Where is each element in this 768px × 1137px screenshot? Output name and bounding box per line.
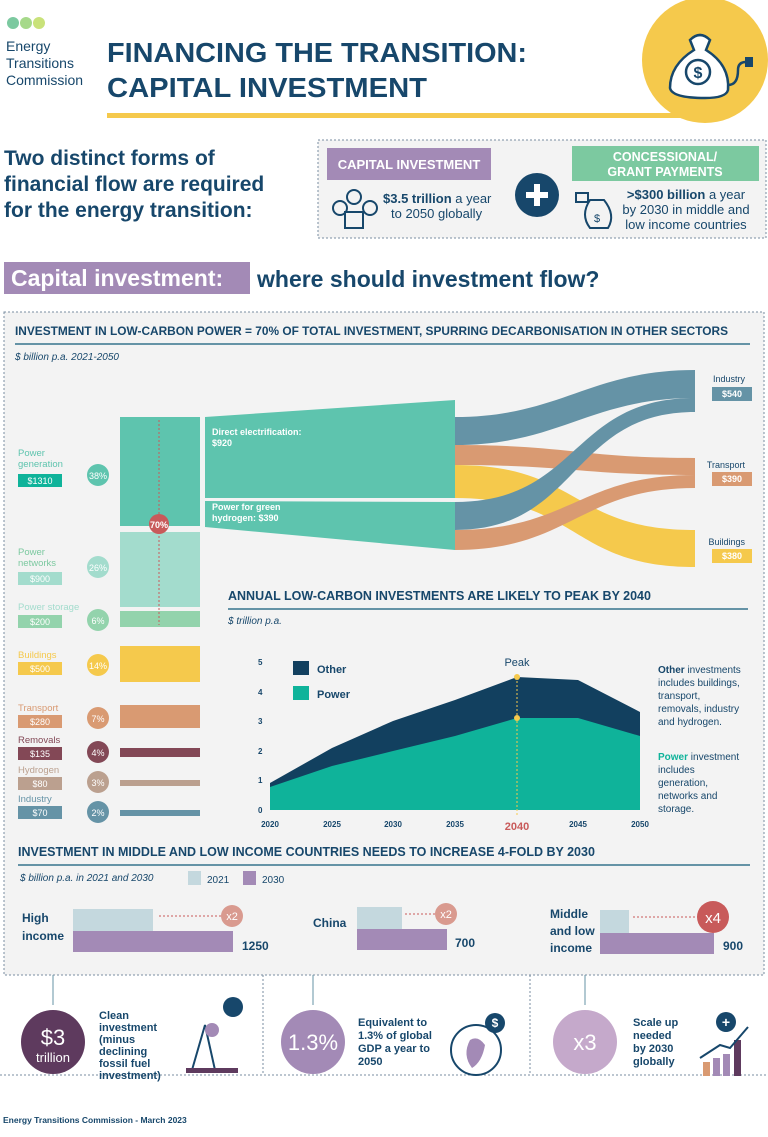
section heading <box>4 262 599 294</box>
footer: Energy Transitions Commission - March 2023 <box>3 1115 187 1125</box>
line chart: annual investments: 5 <box>258 658 263 667</box>
icon: money bag hand <box>576 193 611 228</box>
bars: high income: income <box>22 929 64 943</box>
category labels: 38% <box>89 471 107 481</box>
line chart: annual investments <box>227 589 748 833</box>
bars: middle and low income: Middle <box>550 907 588 921</box>
intro text <box>4 147 264 222</box>
stat: $3 trillion: investment <box>99 1022 157 1034</box>
category labels: 2% <box>91 808 105 818</box>
sankey source: green hydrogen: Power for green <box>212 502 281 512</box>
line chart: annual investments: ANNUAL LOW-CARBON INVESTMENTS ARE LIKELY TO PEAK BY 2040 <box>228 589 651 603</box>
category labels: 14% <box>89 661 107 671</box>
bars: china <box>313 903 475 950</box>
chart notes: generation, <box>658 778 708 789</box>
chart notes: includes buildings, <box>658 678 740 689</box>
capital investment label: CAPITAL INVESTMENT <box>338 157 480 172</box>
chart notes: networks and <box>658 791 717 802</box>
bars: china: x2 <box>440 909 452 921</box>
stat: $3 trillion: (minus <box>99 1034 135 1046</box>
title <box>107 37 707 118</box>
chart notes: Other investments <box>658 665 741 676</box>
bars: high income: 1250 <box>242 939 269 953</box>
stat: 1.3% <box>281 1010 432 1074</box>
title: CAPITAL INVESTMENT <box>107 72 427 103</box>
category labels: 3% <box>91 778 105 788</box>
capital investment label <box>327 148 491 180</box>
stat: $3 trillion <box>21 1010 161 1082</box>
category labels: $80 <box>32 779 48 789</box>
stat: x3: Scale up <box>633 1017 679 1029</box>
sankey targets <box>707 374 752 563</box>
logo <box>6 17 83 88</box>
bars: middle and low income: 900 <box>723 939 743 953</box>
heading: low-carbon power: $ billion p.a. 2021-2050 <box>14 352 119 363</box>
concessional text: low income countries <box>625 217 747 232</box>
category labels: 6% <box>91 616 105 626</box>
stat: x3: x3 <box>573 1030 597 1055</box>
intro text: Two distinct forms of <box>4 147 216 170</box>
stat: x3: needed <box>633 1030 672 1042</box>
category labels: Power <box>18 547 45 558</box>
icon: globe with dollar: $ <box>492 1016 499 1030</box>
stat: 1.3%: 1.3% of global <box>358 1030 432 1042</box>
category labels: $200 <box>30 617 50 627</box>
category labels: $70 <box>32 808 48 818</box>
category labels: $500 <box>30 664 50 674</box>
panel: main <box>4 312 764 975</box>
sankey targets: $540 <box>722 389 742 399</box>
icon: money bag with plug <box>642 0 768 123</box>
panel: two forms <box>318 140 766 238</box>
line chart: annual investments: 1 <box>258 776 263 785</box>
category labels: Transport <box>18 703 59 714</box>
stacked investment bars <box>120 417 200 816</box>
heading: middle and low income: $ billion p.a. in 2021 and 2030 <box>19 873 154 884</box>
line chart: annual investments: 4 <box>258 688 263 697</box>
stat: 1.3%: GDP a year to <box>358 1043 430 1055</box>
stat: $3 trillion: fossil fuel <box>99 1058 150 1070</box>
bars: middle and low income: and low <box>550 924 595 938</box>
icon: plus <box>515 173 559 217</box>
logo: Commission <box>6 72 83 88</box>
sankey flows <box>455 370 695 567</box>
icon: money bag hand: $ <box>594 213 600 225</box>
heading: middle and low income <box>18 845 750 886</box>
icon: gears and bulb <box>333 190 377 228</box>
line chart: annual investments: Peak <box>504 657 530 669</box>
bars: middle and low income <box>550 901 743 955</box>
category labels: Hydrogen <box>18 765 59 776</box>
line chart: annual investments: 2040 <box>505 821 529 833</box>
stat: x3: globally <box>633 1056 675 1068</box>
capital text: to 2050 globally <box>391 206 483 221</box>
stat: x3: by 2030 <box>633 1043 673 1055</box>
bars: high income: High <box>22 911 49 925</box>
bars: middle and low income: income <box>550 941 592 955</box>
stat: 1.3%: Equivalent to <box>358 1017 427 1029</box>
chart notes <box>658 665 741 815</box>
category labels: Removals <box>18 735 60 746</box>
bars: high income: x2 <box>226 911 238 923</box>
concessional label: CONCESSIONAL/ <box>613 150 718 164</box>
logo: Energy <box>6 38 50 54</box>
capital text <box>383 191 492 221</box>
concessional label <box>572 146 759 181</box>
category labels: $1310 <box>27 476 53 486</box>
concessional label: GRANT PAYMENTS <box>607 165 723 179</box>
sankey targets: Buildings <box>708 537 745 547</box>
line chart: annual investments: 3 <box>258 717 263 726</box>
line chart: annual investments: $ trillion p.a. <box>227 616 282 627</box>
category labels: 4% <box>91 748 105 758</box>
bars: middle and low income: x4 <box>705 910 721 927</box>
sankey source: direct electrification: $920 <box>212 438 232 448</box>
bars: china: China <box>313 916 347 930</box>
heading: low-carbon power: INVESTMENT IN LOW-CARBON POWER = 70% OF TOTAL INVESTMENT, SPURRING DECARBONISATION IN OTHER SECTORS <box>15 324 728 338</box>
line chart: annual investments: 2 <box>258 747 263 756</box>
category labels: Buildings <box>18 650 57 661</box>
stat: x3 <box>553 1010 679 1074</box>
line chart: annual investments: 2025 <box>323 820 341 829</box>
category labels: generation <box>18 459 63 470</box>
heading: low-carbon power <box>14 324 750 363</box>
heading: middle and low income: 2021 <box>207 875 230 886</box>
category labels: Industry <box>18 794 52 805</box>
bars: china: 700 <box>455 936 475 950</box>
category labels: $135 <box>30 749 50 759</box>
icon: globe with dollar <box>451 1013 505 1075</box>
category labels: $280 <box>30 717 50 727</box>
intro text: financial flow are required <box>4 173 264 196</box>
stat: 1.3%: 1.3% <box>288 1030 338 1055</box>
stat: $3 trillion: Clean <box>99 1010 129 1022</box>
intro text: for the energy transition: <box>4 199 253 222</box>
concessional text: by 2030 in middle and <box>622 202 750 217</box>
sankey source: green hydrogen: hydrogen: $390 <box>212 513 279 523</box>
category labels: Power storage <box>18 602 79 613</box>
category labels: Power <box>18 448 45 459</box>
chart notes: removals, industry <box>658 704 739 715</box>
category labels: 7% <box>91 714 105 724</box>
chart notes: storage. <box>658 804 694 815</box>
stat: $3 trillion: trillion <box>36 1050 70 1065</box>
stat: $3 trillion: $3 <box>41 1025 65 1050</box>
sankey source: direct electrification <box>205 400 455 498</box>
line chart: annual investments: 2045 <box>569 820 587 829</box>
title: FINANCING THE TRANSITION: <box>107 37 527 68</box>
icon: oil pump <box>186 997 243 1073</box>
stat: $3 trillion: investment) <box>99 1070 161 1082</box>
sankey source: direct electrification: Direct electrification: <box>212 427 302 437</box>
icon: rising bar chart <box>700 1012 748 1076</box>
concessional text <box>622 187 750 232</box>
category labels: networks <box>18 558 56 569</box>
category labels <box>18 448 109 823</box>
icon: money bag with plug: $ <box>694 65 703 82</box>
stat: $3 trillion: declining <box>99 1046 147 1058</box>
bars: high income <box>22 905 269 953</box>
line chart: annual investments: 2035 <box>446 820 464 829</box>
logo: Transitions <box>6 55 74 71</box>
chart notes: transport, <box>658 691 700 702</box>
line chart: annual investments: 2050 <box>631 820 649 829</box>
line chart: annual investments: 2030 <box>384 820 402 829</box>
line chart: annual investments: 2020 <box>261 820 279 829</box>
concessional text: >$300 billion a year <box>627 187 746 202</box>
capital text: $3.5 trillion a year <box>383 191 492 206</box>
section heading: Capital investment: <box>11 265 223 291</box>
chart notes: includes <box>658 765 695 776</box>
heading: middle and low income: 2030 <box>262 875 285 886</box>
icon: rising bar chart: + <box>722 1014 730 1030</box>
stacked investment bars: 70% <box>150 520 168 530</box>
heading: middle and low income: INVESTMENT IN MIDDLE AND LOW INCOME COUNTRIES NEEDS TO INCREASE 4-FOLD BY 2030 <box>18 845 595 859</box>
chart notes: and hydrogen. <box>658 717 722 728</box>
category labels: $900 <box>30 574 50 584</box>
sankey targets: $390 <box>722 474 742 484</box>
sankey source: green hydrogen <box>205 501 455 550</box>
sankey targets: $380 <box>722 551 742 561</box>
sankey targets: Transport <box>707 460 745 470</box>
bottom panels border <box>0 975 768 1075</box>
line chart: annual investments: Other <box>317 664 347 676</box>
category labels: 26% <box>89 563 107 573</box>
line chart: annual investments: Power <box>317 689 351 701</box>
section heading: where should investment flow? <box>256 266 599 292</box>
stat: 1.3%: 2050 <box>358 1056 382 1068</box>
line chart: annual investments: 0 <box>258 806 263 815</box>
sankey targets: Industry <box>713 374 745 384</box>
chart notes: Power investment <box>658 752 739 763</box>
